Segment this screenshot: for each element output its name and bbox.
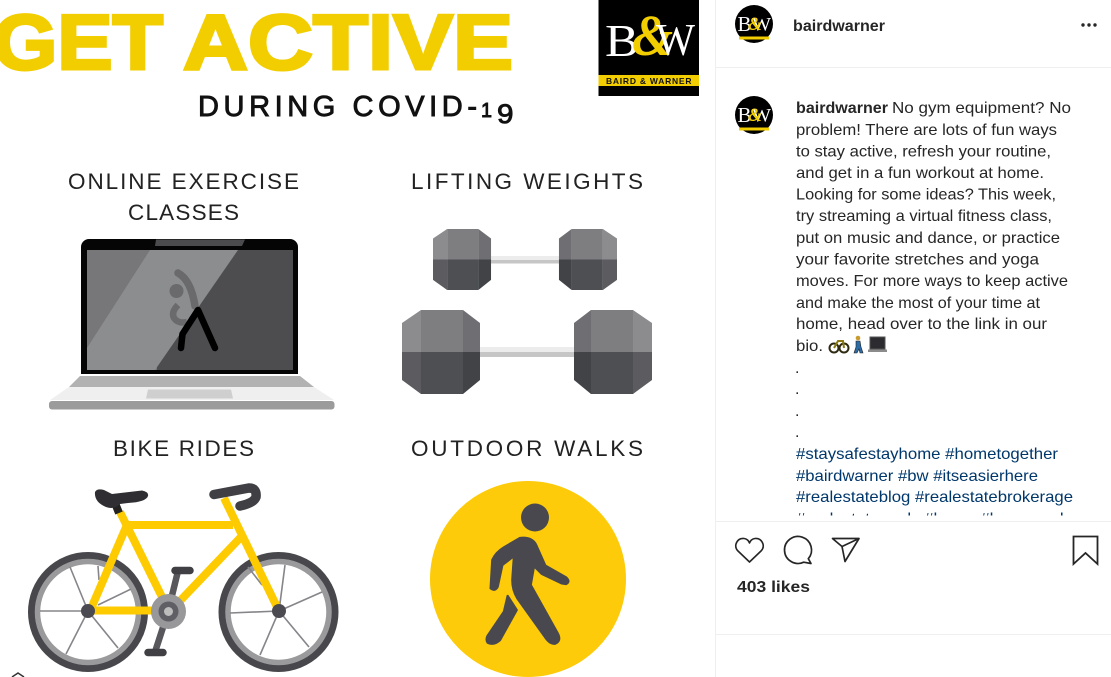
icon: like heart [736, 538, 763, 562]
logo: Baird & Warner: W [656, 15, 695, 65]
caption text: problem! There are lots of fun ways [796, 122, 1057, 139]
icon: more options [1081, 23, 1097, 27]
caption text: try streaming a virtual fitness class, [796, 208, 1052, 225]
crank and pedals [148, 570, 190, 652]
heading: online exercise classes: ONLINE EXERCISE [68, 169, 299, 194]
icon: laptop with exercise video [49, 239, 334, 410]
avatar: header [735, 5, 773, 43]
caption text: #realestateblog #realestatebrokerage [796, 489, 1073, 506]
caption text: bio. [796, 338, 823, 355]
logo: Baird & Warner: & [632, 3, 673, 68]
sidebar borders [716, 0, 1111, 677]
panel: infographic image [0, 0, 699, 677]
heading: bike rides: BIKE RIDES [113, 436, 254, 461]
caption text: . [795, 403, 799, 420]
logo: Baird & Warner [598, 0, 699, 96]
username: bairdwarner [793, 18, 885, 35]
caption text: home, head over to the link in our [796, 316, 1048, 333]
title [0, 0, 513, 86]
caption text: and get in a fun workout at home. [796, 165, 1044, 182]
frame [88, 498, 279, 611]
rear wheel [32, 556, 144, 668]
heading: lifting weights: LIFTING WEIGHTS [411, 169, 643, 194]
subtitle: 1 [481, 100, 492, 122]
icon: bookmark [1074, 536, 1098, 564]
icon: dumbbells [402, 229, 652, 394]
heading: outdoor walks: OUTDOOR WALKS [411, 436, 643, 461]
heading: online exercise classes [68, 169, 299, 225]
caption text: No gym equipment? No [892, 100, 1071, 117]
caption text: put on music and dance, or practice [796, 230, 1060, 247]
caption text: Looking for some ideas? This week, [796, 186, 1056, 204]
caption text: to stay active, refresh your routine, [796, 144, 1051, 160]
handlebar [214, 488, 256, 506]
icon: emoji bike, walker, laptop [830, 336, 887, 353]
panel: instagram sidebar [716, 0, 1111, 677]
logo: Baird & Warner: B [605, 16, 639, 66]
caption text: bairdwarner [796, 100, 888, 117]
icon: share arrow [832, 538, 859, 562]
caption text: #bairdwarner #bw #itseasierhere [796, 468, 1038, 485]
caption text: #realestategoals #home #homegoals [796, 511, 1072, 528]
subtitle: DURING COVID- [198, 91, 477, 123]
subtitle: 9 [497, 99, 514, 129]
front wheel [222, 556, 335, 668]
caption text: . [795, 424, 799, 441]
hubs [81, 604, 286, 618]
caption text: your favorite stretches and yoga [796, 252, 1039, 268]
caption text: . [795, 381, 799, 398]
saddle [95, 489, 148, 513]
title: ACTIVE [183, 0, 513, 86]
caption text: . [795, 360, 799, 377]
icon: cut-off marker at bottom left [12, 673, 24, 677]
caption text [795, 100, 1073, 528]
caption text: #staysafestayhome #hometogether [796, 446, 1059, 463]
caption text: and make the most of your time at [796, 295, 1041, 312]
caption text: moves. For more ways to keep active [796, 273, 1068, 290]
icon: walking person in yellow circle [430, 481, 626, 677]
heading: online exercise classes: CLASSES [128, 200, 239, 225]
logo: Baird & Warner: BAIRD & WARNER [606, 76, 692, 86]
icon: comment bubble [785, 536, 812, 564]
icon: yellow bicycle [32, 488, 335, 668]
avatar: caption [735, 96, 773, 134]
likes count: 403 likes [737, 579, 810, 596]
